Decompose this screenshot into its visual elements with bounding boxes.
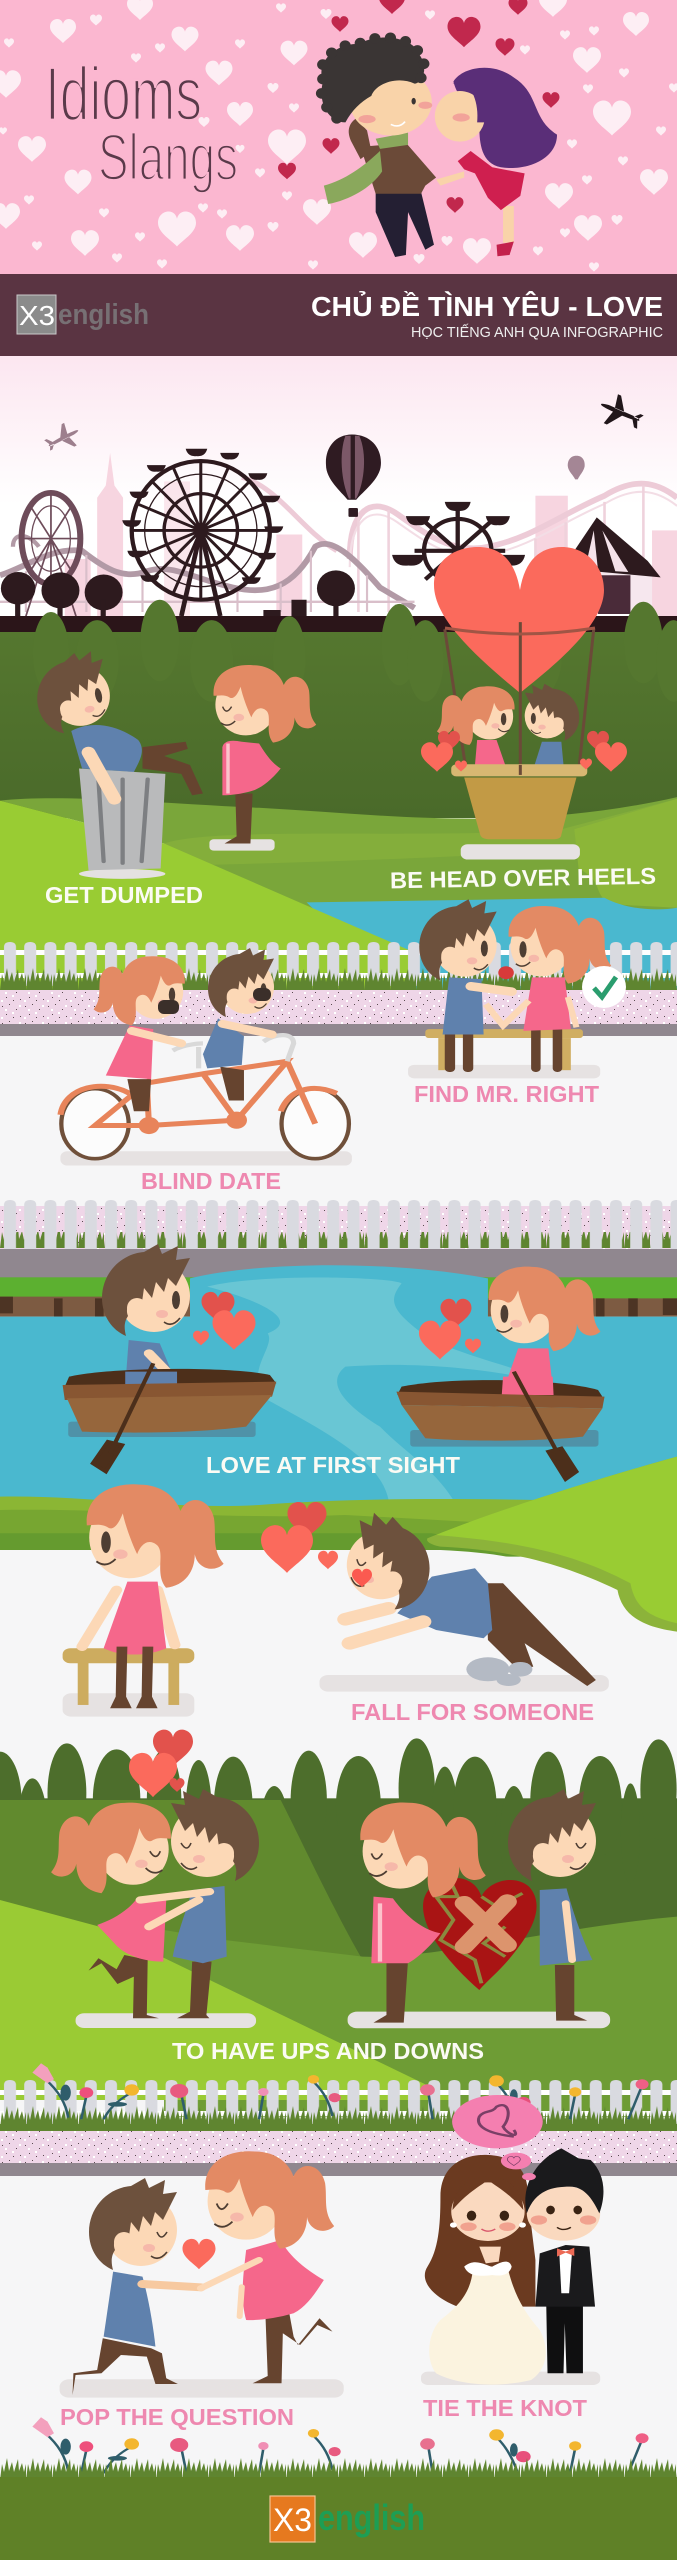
boy body [173,1886,227,1963]
bodies [443,977,484,1034]
logo: X3 english: X3 [273,2502,312,2538]
fence second row [0,1200,677,1249]
hearts [129,1730,193,1797]
title: Idioms Slangs: Idioms [45,52,202,137]
body [397,1568,492,1638]
logo: X3 english grey [17,295,149,334]
white path [0,1550,677,1723]
heading: Chủ đề tình yêu: CHỦ ĐỀ TÌNH YÊU - LOVE [311,290,663,322]
dress [104,1582,166,1655]
mid green hill [164,1917,677,2117]
white hearts pattern [0,0,677,272]
circus tent [570,517,661,614]
heart eye [352,1569,372,1587]
bride face [451,2182,525,2241]
Ferris gondolas [122,449,283,584]
big Ferris wheel [132,461,270,616]
arms [471,986,512,992]
boy legs [177,1962,212,2018]
trees [1,570,355,620]
stones [466,1657,532,1686]
title: Idioms Slangs: Slangs [98,120,238,194]
trash can [79,869,165,879]
body [71,725,142,772]
subheading: HỌC TIẾNG ANH QUA INFOGRAPHIC [411,324,663,341]
bench [78,1662,89,1705]
character: girl turning away [209,665,316,851]
flower [498,966,514,979]
arm [89,752,114,799]
label: find mr right: FIND MR. RIGHT [414,1081,599,1107]
arms [82,1590,175,1647]
thought bubble [452,2095,543,2180]
panel: footer grass [0,2456,677,2560]
hearts [419,1299,481,1359]
balloon heart [434,547,604,693]
wheels [61,1089,349,1159]
character: bride and groom [421,2095,603,2385]
illustration: heart hot air balloon [421,547,627,860]
legs [445,1026,562,1072]
arms [142,2284,201,2287]
bottom flowers [32,2417,649,2473]
plane left [41,419,84,457]
river banks [0,1277,225,1297]
couple bodies in basket [475,740,505,765]
girl dress [97,1897,166,1962]
panel: title band [0,274,677,356]
frame [60,1061,337,1126]
groom face [527,2186,600,2241]
broken heart [423,1878,537,1990]
character: girl in boat [396,1267,605,1479]
boy [555,1965,587,2021]
character: get dumped [29,648,203,879]
girl [374,1960,408,2023]
bright green hill [0,1900,458,2100]
character: kissing couple [51,1730,259,2018]
plane right [594,390,648,436]
mid green hill [0,797,677,922]
sunglasses [158,988,271,1014]
carousel wheel [392,502,525,596]
label: get dumped: GET DUMPED [45,882,203,908]
girl legs [253,2313,332,2383]
panel: green forest section [0,1738,677,2117]
logo: X3 english grey: english [58,299,149,331]
small Ferris wheel [22,493,80,616]
hearts [193,1292,256,1350]
label: tie the knot: TIE THE KNOT [423,2395,587,2421]
hill tips [33,600,677,702]
logo: X3 english [270,2496,425,2542]
icon: check bubble [582,966,626,1008]
boy body [104,2272,155,2347]
handlebars [173,1035,294,1068]
character: blind date tandem bicycle [60,948,352,1166]
legs [486,1583,596,1686]
hearts [261,1502,338,1573]
label: blind date: BLIND DATE [141,1168,281,1194]
character: girl on bench [63,1484,224,1717]
bench [425,1029,583,1038]
panel: river crossing section [0,1200,677,1723]
balloon ropes [445,622,594,772]
character: pop the question [60,2151,344,2398]
arms [132,1024,272,1043]
ground shadows [76,2013,256,2028]
dark ground strip [0,616,677,642]
bright green hill [0,801,410,993]
panel: amusement park skyline [0,356,677,642]
panel: pink header [0,0,677,274]
hot air balloon [326,435,381,517]
legs [127,1067,244,1111]
label: to have ups and downs: TO HAVE UPS AND DOWNS [172,2038,484,2064]
arms [140,1892,209,1927]
roller coasters [0,477,677,612]
bodies [106,1026,153,1079]
heart [182,2239,216,2269]
red hearts [278,0,560,213]
hearts left [421,731,467,772]
illustration: kissing couple [321,38,557,257]
label: be head over heels: BE HEAD OVER HEELS [390,863,656,893]
character: boy in boat [63,1244,276,1472]
label: love at first sight: LOVE AT FIRST SIGHT [206,1452,460,1478]
pink buildings [65,453,677,618]
bright green hill [427,1457,677,1632]
bandage [464,1902,507,1947]
title: Idioms Slangs [45,52,238,194]
river [0,1265,677,1507]
label: fall for someone: FALL FOR SOMEONE [351,1699,594,1725]
fence row with grass and pavement (top) [0,942,677,1036]
character: boy falling for someone [261,1502,609,1692]
panel: green hills section [0,600,677,993]
character: find mr right couple on bench [408,899,626,1078]
arms [345,1608,423,1643]
basket [461,844,580,860]
legs [110,1647,158,1708]
girl legs [89,1955,159,2018]
legs [142,742,203,795]
boy [321,38,436,257]
bride dress [429,2267,546,2385]
girl [435,68,557,256]
boy legs [73,2338,178,2395]
girl dress [243,2240,324,2320]
small balloon [568,456,585,479]
forest background [0,1738,677,2098]
green bank lower [0,1497,677,1553]
river [307,898,677,993]
label: pop the question: POP THE QUESTION [60,2404,294,2430]
hearts right [580,731,627,772]
character: separated couple with broken heart [360,1789,596,2023]
left lighter forest [0,1800,363,1967]
fence and flowers lower row [0,2063,677,2176]
logo: X3 english: english [318,2497,425,2538]
bride hair [425,2155,535,2307]
logo: X3 english grey: X3 [19,300,55,331]
groom tux [546,2303,583,2373]
